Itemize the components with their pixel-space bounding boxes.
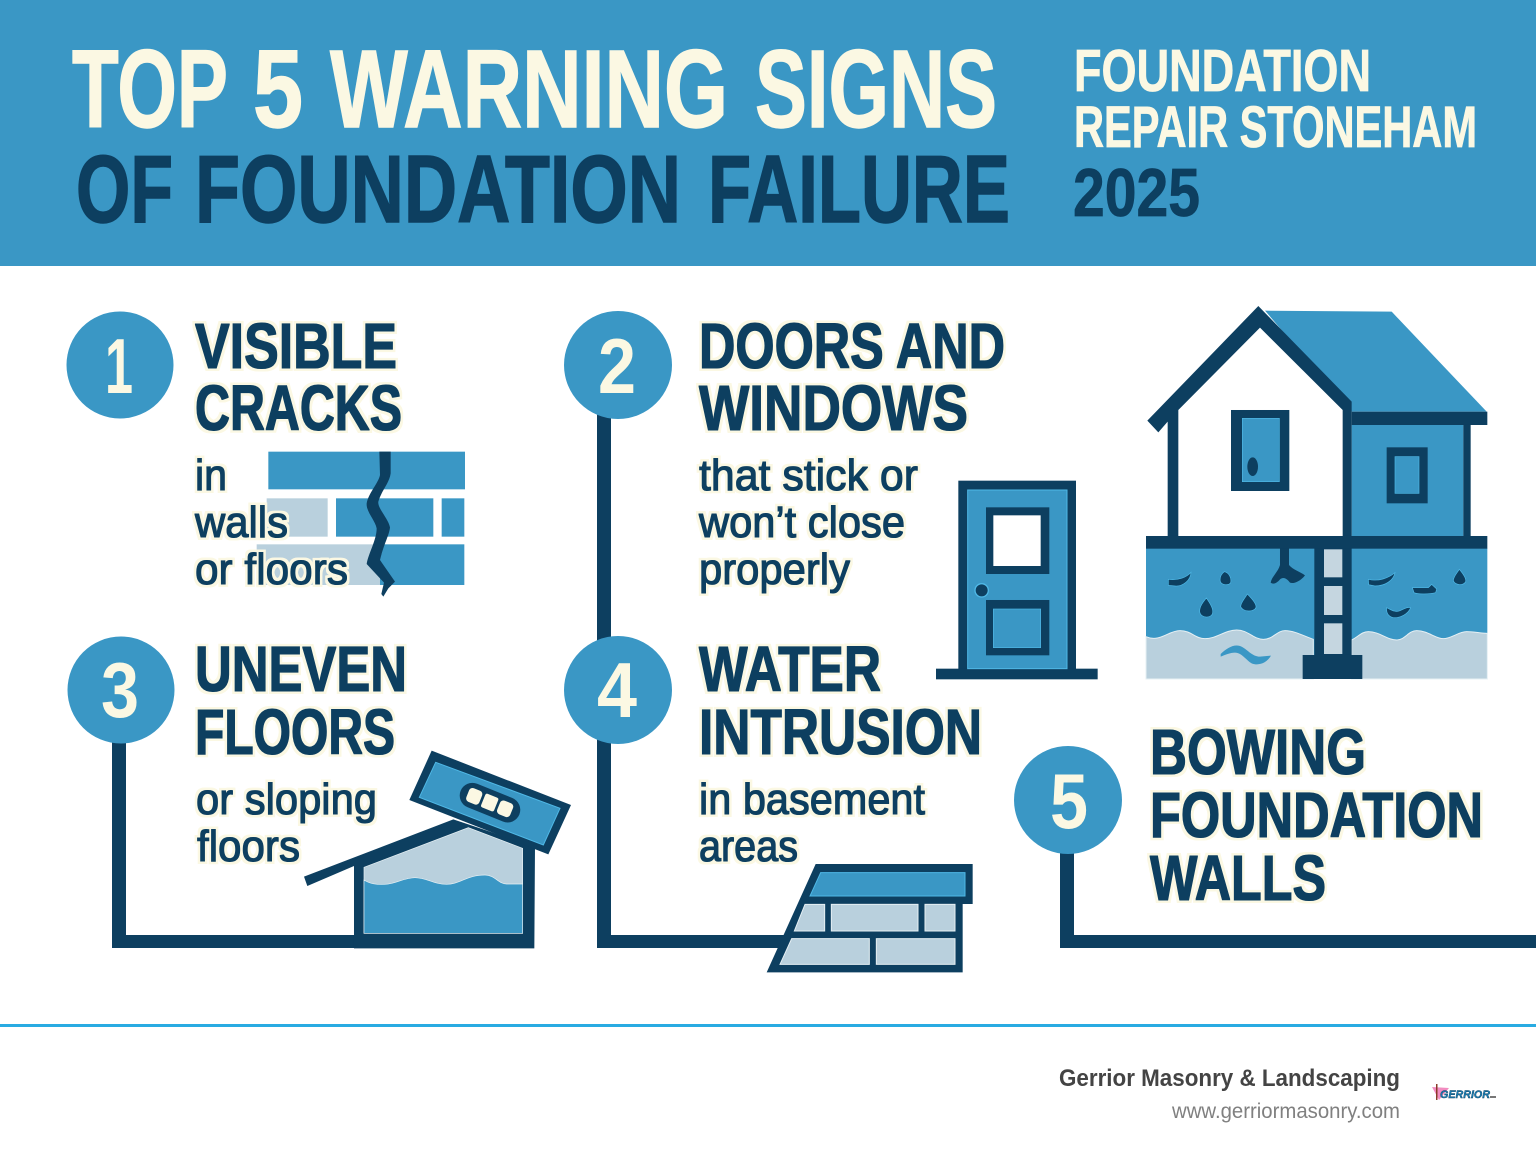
title: WARNING — [330, 28, 728, 151]
panel: sign 3 uneven floors — [68, 633, 407, 871]
heading 4: WATER — [699, 633, 881, 705]
footer rule — [0, 1024, 1536, 1027]
header banner — [0, 0, 1536, 266]
logo: GERRIOR — [1440, 1089, 1490, 1101]
heading 3: FLOORS — [195, 696, 395, 768]
title: OF — [76, 136, 173, 243]
text 1: in — [195, 451, 227, 500]
text 2: won’t close — [698, 498, 905, 547]
badge 5 — [1014, 746, 1122, 854]
title: SIGNS — [755, 28, 997, 151]
panel: sign 5 bowing foundation walls — [1014, 716, 1483, 914]
text 1: walls — [194, 498, 288, 547]
text 3: floors — [197, 822, 300, 871]
heading 1: VISIBLE — [195, 310, 397, 382]
heading 1: CRACKS — [195, 372, 402, 444]
footer website: www.gerriormasonry.com — [1171, 1100, 1400, 1123]
heading 2 — [699, 310, 1005, 444]
heading 5: WALLS — [1150, 842, 1326, 914]
badge 5: 5 — [1050, 757, 1088, 845]
panel: sign 2 doors and windows — [564, 310, 1005, 594]
icon: door — [936, 481, 1098, 679]
heading 2: WINDOWS — [699, 372, 968, 444]
connector lines — [112, 410, 1536, 948]
heading 5: BOWING — [1150, 716, 1366, 788]
text 2 — [698, 451, 918, 594]
title: 5 — [253, 28, 303, 151]
logo — [1432, 1084, 1496, 1101]
heading 5 — [1150, 716, 1483, 914]
text 4 — [699, 775, 925, 871]
heading 1 — [195, 310, 402, 444]
text 2: properly — [699, 545, 850, 594]
text 1: or floors — [195, 545, 348, 594]
heading 3 — [195, 633, 407, 768]
heading 4: INTRUSION — [699, 696, 982, 768]
badge 1 — [66, 312, 174, 418]
icon: basement wall with water — [767, 864, 973, 972]
panel: sign 4 water intrusion — [564, 633, 982, 871]
icon: house with failing foundation — [1146, 306, 1487, 679]
heading 4 — [699, 633, 982, 768]
badge 1: 1 — [105, 322, 133, 410]
heading 3: UNEVEN — [195, 633, 407, 705]
title: FAILURE — [708, 136, 1010, 243]
subtitle: FOUNDATION — [1074, 38, 1371, 104]
badge 3: 3 — [101, 646, 139, 734]
text 3: or sloping — [196, 775, 377, 824]
title: TOP — [72, 28, 228, 151]
subtitle: 2025 — [1073, 155, 1200, 231]
title — [72, 28, 1010, 243]
badge 2 — [564, 311, 672, 419]
badge 2: 2 — [598, 322, 636, 410]
icon: cracked brick wall — [257, 452, 465, 597]
text 4: areas — [699, 822, 798, 871]
badge 4: 4 — [597, 646, 637, 734]
text 3 — [196, 775, 377, 871]
title: FOUNDATION — [195, 136, 681, 243]
heading 2: DOORS AND — [699, 310, 1005, 382]
text 2: that stick or — [699, 451, 918, 500]
text 1 — [194, 451, 348, 594]
icon: tilted level on sloping roof — [304, 751, 571, 948]
subtitle — [1073, 38, 1477, 231]
text 4: in basement — [699, 775, 925, 824]
badge 3 — [68, 636, 174, 744]
panel: sign 1 visible cracks — [66, 310, 402, 594]
footer company name: Gerrior Masonry & Landscaping — [1059, 1065, 1400, 1092]
badge 4 — [564, 636, 672, 744]
